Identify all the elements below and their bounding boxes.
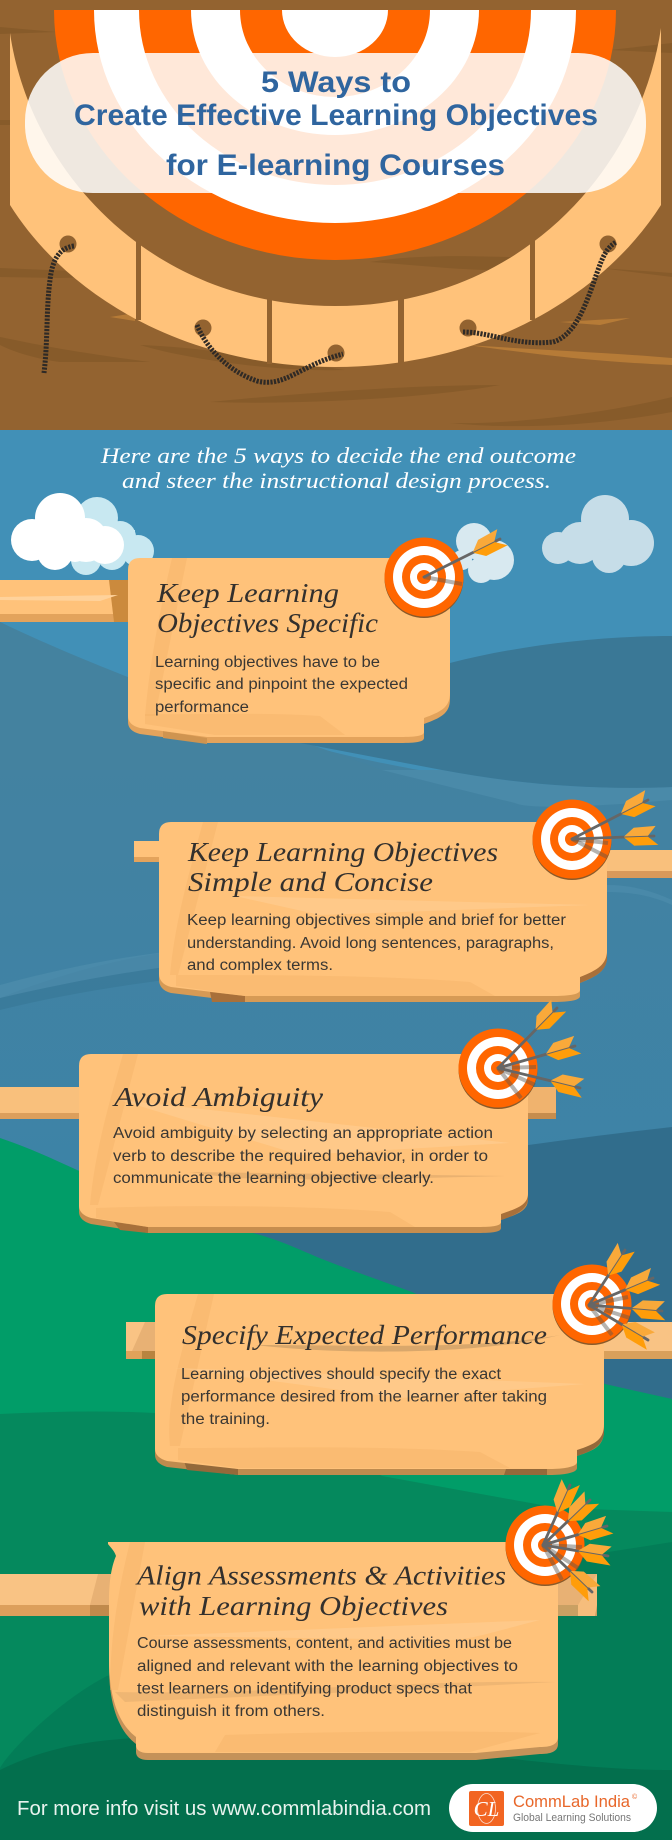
footer text: For more info visit us www.commlabindia.com (17, 1798, 431, 1820)
card 3 body text: communicate the learning objective clearly. (113, 1170, 434, 1187)
card 2 body text: understanding. Avoid long sentences, paragraphs, (187, 935, 554, 952)
card 5 heading (135, 1560, 506, 1621)
icon: target 5 (506, 1477, 614, 1601)
panel: card 2 (159, 822, 607, 1002)
card 1 heading: Objectives Specific (157, 608, 378, 638)
card 1 body text: specific and pinpoint the expected (155, 676, 408, 693)
card 3 body text: Avoid ambiguity by selecting an appropriate action (113, 1125, 493, 1142)
card 1 body text: performance (155, 699, 249, 716)
card 5 heading: with Learning Objectives (139, 1591, 448, 1621)
title panel (25, 53, 646, 193)
intro text: Here are the 5 ways to decide the end outcome (100, 443, 576, 468)
card 4 body text: Learning objectives should specify the exact (181, 1366, 502, 1383)
card 2 planks (134, 841, 672, 878)
icon: target 3 (458, 998, 586, 1109)
card 2 heading: Simple and Concise (188, 867, 433, 897)
intro text (100, 443, 576, 493)
card 1 body text: Learning objectives have to be (155, 654, 380, 671)
card 5 body text: test learners on identifying product specs that (137, 1680, 473, 1698)
cloud: right (542, 495, 654, 573)
card 1 plank (0, 580, 128, 622)
icon: target 2 (532, 789, 658, 880)
logo badge (449, 1784, 657, 1832)
icon: target 4 (552, 1241, 667, 1350)
card 1 heading: Keep Learning (156, 578, 339, 608)
card 2 heading: Keep Learning Objectives (187, 837, 498, 867)
card 1 body text (155, 654, 408, 716)
wooden target collar (10, 28, 661, 367)
card 1 heading (156, 578, 378, 638)
cloud: behind first target (452, 523, 514, 583)
panel: card 3 (79, 1054, 528, 1233)
card 5 heading: Align Assessments & Activities (135, 1560, 506, 1590)
card 5 planks (0, 1574, 597, 1616)
title panel: 5 Ways to (261, 66, 411, 99)
ropes (44, 242, 616, 382)
card 2 body text: and complex terms. (187, 957, 333, 974)
logo name: CommLab India (513, 1792, 631, 1811)
card 2 body text (187, 912, 566, 974)
icon: large target (0, 0, 672, 260)
card 4 body text: performance desired from the learner after taking (181, 1388, 547, 1406)
card 5 body text: aligned and relevant with the learning objectives to (137, 1658, 518, 1675)
panel: card 5 (108, 1542, 558, 1760)
logo icon (469, 1791, 504, 1826)
cloud: left (11, 493, 154, 575)
background: sky and hills (0, 430, 672, 1840)
card 3 body text (113, 1125, 493, 1187)
title panel: for E-learning Courses (166, 149, 505, 182)
header: wooden background (0, 0, 672, 430)
logo copyright: © (632, 1793, 638, 1801)
logo icon: CL (474, 1797, 499, 1821)
card 5 body text: Course assessments, content, and activities must be (137, 1635, 512, 1652)
panel: card 4 (155, 1294, 604, 1475)
title panel: Create Effective Learning Objectives (74, 99, 598, 132)
card 4 planks (126, 1322, 672, 1359)
card 4 heading: Specify Expected Performance (182, 1320, 547, 1350)
card 3 heading: Avoid Ambiguity (112, 1082, 323, 1112)
card 3 planks (0, 1087, 556, 1119)
card 2 heading (187, 837, 498, 897)
card 3 body text: verb to describe the required behavior, in order to (113, 1148, 488, 1165)
logo tagline: Global Learning Solutions (513, 1812, 631, 1824)
intro text: and steer the instructional design process. (122, 468, 551, 493)
card 5 body text: distinguish it from others. (137, 1703, 325, 1720)
panel: card 1 (128, 558, 450, 744)
card 2 body text: Keep learning objectives simple and brief for better (187, 912, 566, 929)
card 5 body text (137, 1635, 518, 1720)
card 4 body text: the training. (181, 1411, 270, 1428)
icon: target 1 (384, 528, 508, 618)
card 4 body text (181, 1366, 547, 1428)
